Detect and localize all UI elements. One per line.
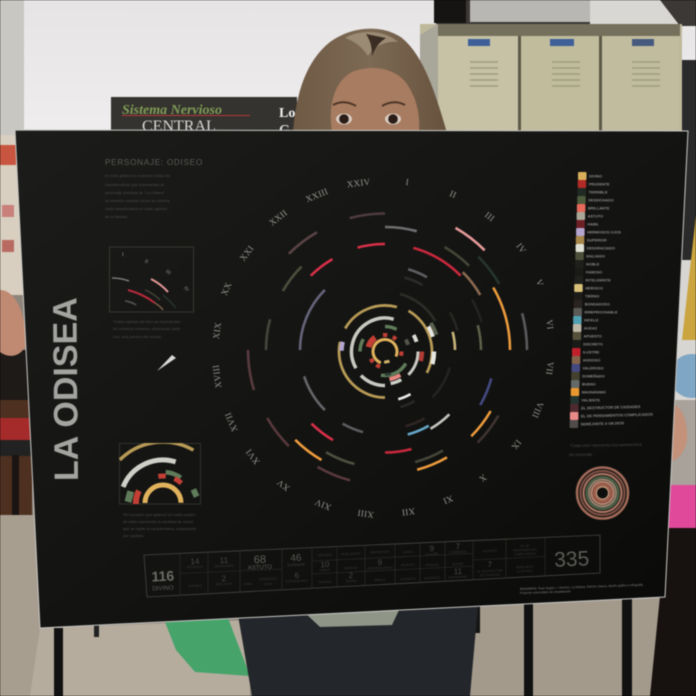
roman numerals ring: XVIII <box>211 364 224 389</box>
legend entries: INTELIGENTE <box>586 278 611 282</box>
legend entries: INFELIZ <box>584 318 599 322</box>
radial chart: chapters and characteristics <box>192 157 578 543</box>
roman numerals ring: XII <box>401 506 416 518</box>
table small numbers and labels: 11 <box>454 567 463 576</box>
roman numerals ring: V <box>534 278 546 288</box>
roman numerals ring: XXI <box>238 243 256 263</box>
intro paragraph: de la historia. <box>105 214 128 219</box>
caption: chapters: *Cada capítulo del libro se representan <box>113 319 180 324</box>
table small numbers and labels: HEROICO <box>344 566 359 570</box>
poster panel <box>15 130 688 628</box>
legend entries: BUENO <box>582 382 596 386</box>
legend entries: DESDICHADO <box>588 198 614 202</box>
table big numbers: 335 <box>554 547 590 572</box>
table small numbers and labels: DISCRETO <box>400 577 416 581</box>
legend entries: ILUSTRE <box>583 350 600 354</box>
roman numerals ring: IX <box>509 438 523 452</box>
legend entries: AUDAZ <box>584 326 598 330</box>
table small numbers and labels: EL DE <box>521 544 529 548</box>
table big numbers: SUPERIOR <box>287 563 305 567</box>
roman numerals ring: XI <box>442 493 455 506</box>
explainer box: chapters <box>110 247 194 312</box>
background sign: CENTRAL <box>142 118 216 135</box>
roman numerals ring: XIII <box>357 508 375 520</box>
legend entries <box>570 172 653 428</box>
legend entries: APUESTO <box>584 334 602 338</box>
icon: white pointer wedge <box>157 355 176 371</box>
caption: color meaning <box>569 442 643 457</box>
table big numbers: 68 <box>253 554 266 566</box>
table small numbers and labels: 7 <box>487 560 493 569</box>
roman numerals ring: IV <box>514 241 529 255</box>
intro paragraph: se muestra cuántas veces se nombra <box>105 198 170 203</box>
table frame <box>144 535 600 597</box>
credits <box>520 583 643 595</box>
roman numerals ring: XXIV <box>346 176 371 190</box>
legend entries: DESGRACIADO <box>587 246 615 250</box>
explainer box: quantity <box>118 442 202 505</box>
table small numbers and labels: 6 <box>294 571 300 580</box>
mini concentric rings <box>577 468 628 518</box>
legend entries: NOBLE <box>586 262 600 266</box>
table small numbers and labels: MAGNÁNIMO <box>448 575 468 579</box>
background sign <box>111 97 297 138</box>
legend entries: HABIL <box>587 222 600 226</box>
roman numerals ring: XVI <box>244 447 262 467</box>
intro paragraph: cada característica en cada capítulo <box>105 206 167 211</box>
table small numbers and labels: APUESTO <box>401 563 416 567</box>
legend entries: VALIENTE <box>581 398 600 402</box>
table small numbers and labels: HERMOSOS <box>259 577 277 581</box>
caption: quantity: que se repite la característica, empezando <box>123 526 196 531</box>
caption: quantity <box>123 512 196 538</box>
legend entries: DOMEÑADO <box>582 374 605 378</box>
table small numbers and labels: 9 <box>429 544 435 553</box>
table small numbers and labels: 10 <box>320 560 330 569</box>
intro paragraph <box>105 173 170 219</box>
table small numbers and labels: COMPLICADOS <box>514 552 536 556</box>
legend: characteristics <box>570 172 653 428</box>
table small numbers and labels: 11 <box>220 556 229 565</box>
caption: color meaning: *Cada color representa una característica <box>570 442 643 448</box>
table small numbers and labels: AUDAZ <box>403 550 413 554</box>
legend entries: ANSIOSO <box>583 358 600 362</box>
legend entries: ASTUTO <box>588 214 603 218</box>
summary table <box>144 535 600 597</box>
table small numbers and labels: VALIENTE <box>483 549 497 553</box>
woman peeking over the poster <box>293 29 447 133</box>
table small numbers and labels: INFELIZ <box>374 578 386 582</box>
table big numbers: DIVINO <box>152 585 174 592</box>
table small numbers and labels: PENSAMIENTOS <box>513 547 537 553</box>
table small numbers and labels <box>187 542 537 588</box>
table small numbers and labels: VALEROSO <box>424 576 441 580</box>
table big numbers: 116 <box>151 568 175 584</box>
roman numerals ring: I <box>405 177 410 187</box>
legend entries: SEMEJANTE A UN DIOS <box>581 421 625 427</box>
caption: quantity: de tabla representa la cantidad de veces <box>123 519 193 524</box>
title: La Odisea: LA ODISEA <box>46 297 86 481</box>
table small numbers and labels: HÁBIL <box>244 582 253 586</box>
table small numbers and labels: MALVADO <box>318 553 333 557</box>
background sign: G <box>279 123 290 138</box>
table small numbers and labels: ANSIOSO <box>425 563 440 567</box>
table small numbers and labels: OJOS <box>264 582 272 586</box>
roman numerals ring: VII <box>544 361 556 376</box>
caption: chapters: uno, una porción del círculo. <box>113 334 162 339</box>
credits: BIOGRAFÍA: Texto Según — Homero. La Odisea. Edición clásica, diseño gráfico e infografía <box>520 583 643 591</box>
table small numbers and labels: BONDADOSO <box>370 550 390 554</box>
table grid <box>180 538 545 595</box>
explainer box: chapters: II <box>143 259 149 265</box>
intro paragraph: En este gráfico se muestran todas las <box>105 173 170 178</box>
table small numbers and labels: PRUDENTE <box>187 565 203 569</box>
roman numerals ring: II <box>448 188 458 200</box>
explainer box: chapters: I <box>122 253 124 258</box>
legend entries: HEROICO <box>585 286 603 290</box>
table small numbers and labels: DESDICHADO <box>214 564 235 568</box>
table small numbers and labels: INTELIGENTE <box>341 552 361 556</box>
table small numbers and labels: NOBLE <box>320 568 330 572</box>
table small numbers and labels: TERRIBLE <box>188 584 202 588</box>
legend entries: DIVINO <box>589 174 602 178</box>
caption: color meaning: del personaje <box>569 452 592 457</box>
table small numbers and labels: ILUSTRE <box>426 552 438 556</box>
legend entries: EL DESTRUCTOR DE CIUDADES <box>581 405 641 410</box>
central dense rings <box>311 277 459 426</box>
legend entries: IRREPROCHABLE <box>584 310 618 314</box>
roman numerals ring: XV <box>275 477 292 493</box>
table small numbers and labels: DESGRACIADO <box>286 578 309 583</box>
heading: personaje: PERSONAJE: ODISEO <box>105 158 203 167</box>
table small numbers and labels: DE CIUDADES <box>480 573 500 577</box>
table small numbers and labels: FAMOSO <box>318 580 332 584</box>
roman numerals ring: VIII <box>530 401 546 420</box>
table big numbers: ASTUTO <box>248 564 273 572</box>
background sign: Sistema Nervioso <box>122 103 222 118</box>
table small numbers and labels: 2 <box>221 574 227 583</box>
roman numerals ring: XXIII <box>304 186 330 204</box>
legend entries: BRILLANTE <box>588 206 610 210</box>
roman numerals ring: VI <box>544 319 556 330</box>
legend entries: FAMOSO <box>586 270 602 274</box>
caption: quantity: *El recuadro que aparece en cada cuadro <box>123 512 195 517</box>
legend entries: VALEROSO <box>582 366 604 370</box>
roman numerals ring: XX <box>219 280 234 297</box>
legend entries: MAGNÁNIMO <box>582 390 606 394</box>
legend entries: EL DE PENSAMIENTOS COMPLICADOS <box>581 413 653 419</box>
caption: chapters <box>113 319 181 339</box>
table small numbers and labels: IRREPROCHABLE <box>367 565 393 571</box>
table small numbers and labels: 7 <box>455 542 461 551</box>
legend entries: TIERNO <box>585 294 599 298</box>
roman numerals ring: XXII <box>267 208 289 228</box>
legend entries: PRUDENTE <box>589 182 610 186</box>
lockers <box>420 24 682 136</box>
table big numbers <box>151 547 590 592</box>
explainer box: chapters: IV <box>182 286 189 294</box>
caption: chapters: en números romanos, abarcando cada <box>113 326 181 331</box>
legend entries: HERMOSOS OJOS <box>587 230 621 234</box>
legend entries: TERRIBLE <box>588 190 608 194</box>
roman numerals ring: XIX <box>211 321 223 340</box>
intro paragraph: características que representan al <box>105 182 164 187</box>
legend entries: DISCRETO <box>583 342 603 346</box>
legend entries: MALVADO <box>586 254 605 258</box>
roman numerals ring: XVII <box>223 411 240 433</box>
table big numbers: 46 <box>290 553 302 564</box>
legend entries: BONDADOSO <box>585 302 610 306</box>
outer chapter arcs <box>192 157 578 543</box>
table small numbers and labels: DOMEÑADO <box>449 549 468 554</box>
table small numbers and labels: BRILLANTE <box>216 582 232 586</box>
hands <box>0 290 687 461</box>
table small numbers and labels: 9 <box>377 558 383 567</box>
table small numbers and labels: BUENO <box>453 562 464 566</box>
table small numbers and labels: EL DESTRUCTOR <box>477 568 503 574</box>
roman numerals ring: X <box>477 472 489 485</box>
roman numerals ring: III <box>483 210 497 224</box>
table small numbers and labels: 14 <box>190 557 200 566</box>
credits: Proyecto universitario de visualización <box>520 589 571 595</box>
explainer box: chapters: III <box>164 269 171 277</box>
roman numerals ring: XIV <box>313 497 333 513</box>
background sign: Lo <box>279 106 295 121</box>
table small numbers and labels: 2 <box>348 571 354 580</box>
intro paragraph: personaje principal de "La Odisea" <box>105 190 165 195</box>
legend entries: SUPERIOR <box>587 238 607 242</box>
table small numbers and labels: TIERNO <box>345 579 357 583</box>
caption: quantity: por capítulo. <box>123 533 144 538</box>
table small numbers and labels: SEMEJANTE <box>516 565 534 569</box>
roman numerals ring <box>211 176 556 520</box>
table small numbers and labels: A UN DIOS <box>517 569 533 573</box>
